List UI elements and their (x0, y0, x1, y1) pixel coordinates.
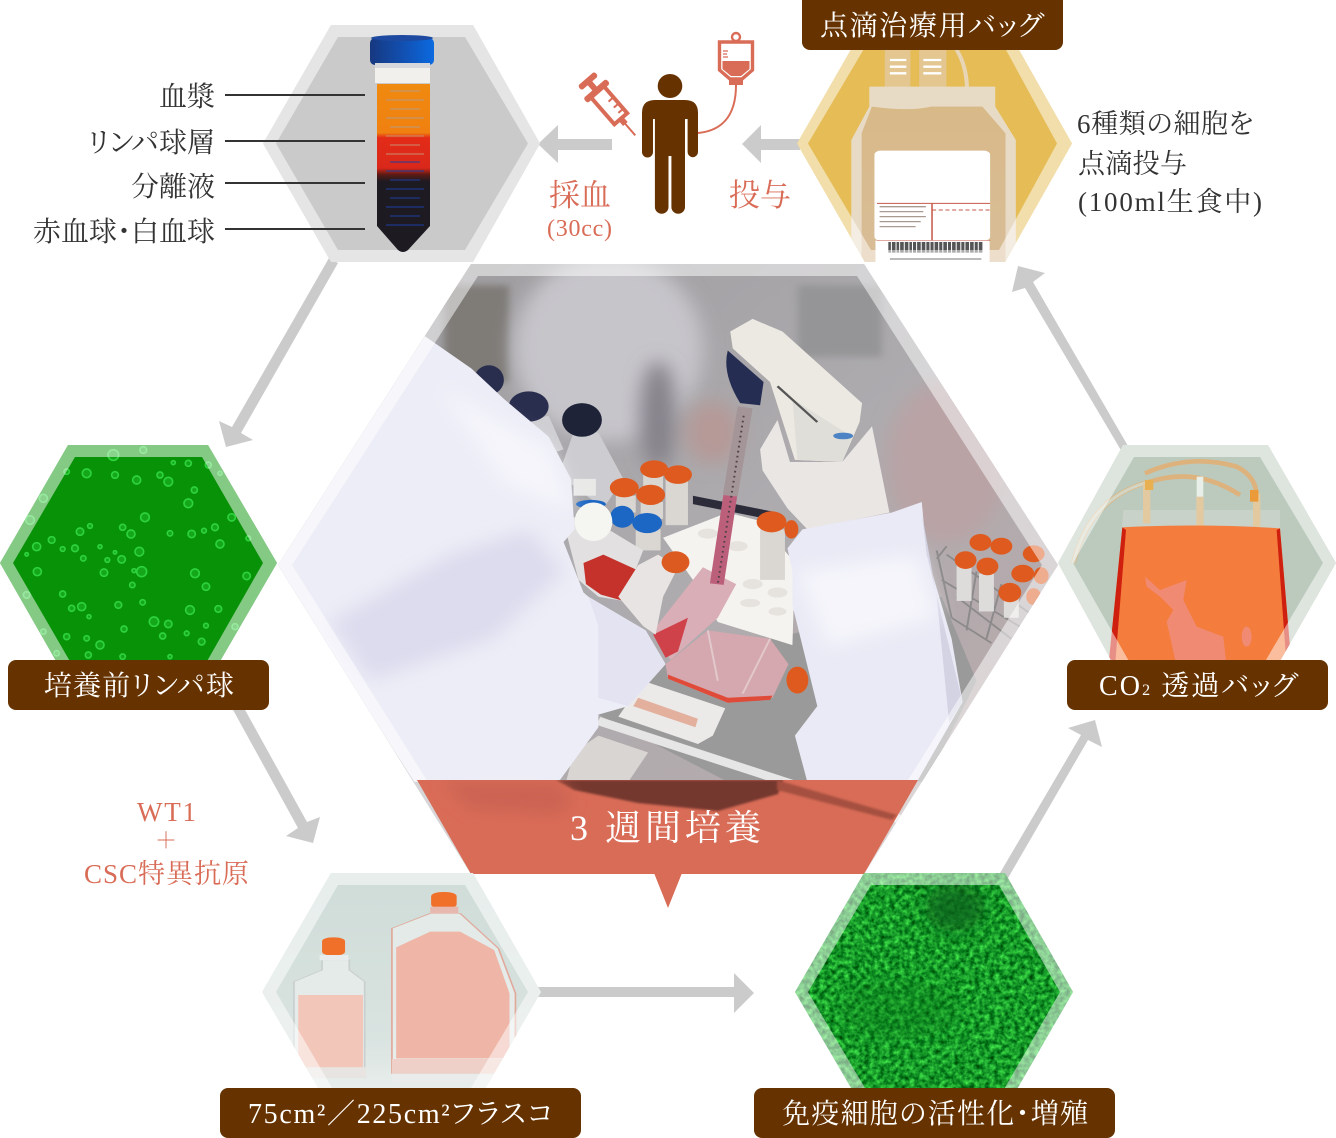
image: orange culture bag (1073, 461, 1292, 667)
label: lymphocyte layer: リンパ球層 (88, 127, 215, 159)
arrow: person to tube (blood draw) (538, 125, 612, 163)
small flask (294, 960, 365, 1070)
right sleeve (787, 502, 963, 782)
label: separation liquid: 分離液 (131, 171, 215, 203)
pipette (730, 407, 745, 496)
tubes (616, 475, 785, 580)
flask on bench (666, 630, 788, 703)
label: administration: 投与 (729, 178, 791, 213)
image: lab worker in safety cabinet (275, 256, 1071, 887)
callout pointer (654, 873, 682, 908)
icon: syringe (575, 69, 647, 145)
image: drip bag (851, 50, 1016, 267)
left glove (618, 555, 678, 635)
pipette controller (730, 319, 862, 462)
packets (618, 681, 725, 744)
panel: pre-culture lymphocyte hexagon (0, 445, 277, 682)
label: CO2 permeable bag: CO2 透過バッグ (1099, 670, 1299, 702)
bench (598, 597, 976, 782)
panel: blood separation tube hexagon (263, 25, 540, 262)
label: pre-culture lymphocytes (8, 660, 269, 710)
label: drip treatment bag (802, 0, 1063, 50)
text block: six cell types administered: (100ml生食中) (1078, 187, 1262, 217)
label: blood draw: 採血 (549, 178, 611, 213)
arrow: tube to pre-culture lymphocytes (219, 258, 338, 447)
label: drip treatment bag: 点滴治療用バッグ (820, 10, 1045, 42)
banner: three weeks of culture (417, 780, 918, 908)
large flask (392, 913, 515, 1073)
wire rack (937, 546, 1036, 643)
arrow: pre-culture lymphocytes to flasks (232, 708, 320, 843)
panel: central photo hexagon (275, 256, 1071, 908)
label: WT1 plus CSC-specific antigen: WT1 (137, 797, 196, 827)
image: dense green cells (795, 873, 1073, 1110)
arrow: flasks to activated cells (538, 973, 754, 1013)
image: centrifuge tube (370, 35, 434, 252)
panel: activated immune cells hexagon (795, 873, 1073, 1110)
label: pre-culture lymphocytes: 培養前リンパ球 (44, 670, 234, 702)
label: WT1 plus CSC-specific antigen (84, 797, 249, 889)
rack white (663, 513, 795, 645)
icon: person (642, 74, 698, 214)
leader lines (225, 95, 365, 229)
label: CO2 permeable bag (1067, 660, 1328, 710)
red flask (568, 517, 643, 600)
text block: six cell types administered: 6種類の細胞を (1077, 109, 1254, 139)
label: flask sizes (220, 1088, 581, 1138)
right glove (760, 420, 889, 529)
bench bar (598, 721, 902, 820)
arrow: activated cells to CO2 bag (1000, 720, 1102, 878)
label: red and white blood cells: 赤血球・白血球 (33, 216, 215, 248)
banner: three weeks of culture: 3 週間培養 (570, 808, 761, 848)
label: 30cc: (30cc) (547, 216, 612, 242)
main coat (275, 336, 666, 782)
image: sparse green cells (23, 447, 251, 659)
arrow: CO2 bag to drip bag (1012, 266, 1128, 452)
arrow: drip bag to person (administration) (742, 125, 800, 163)
label: WT1 plus CSC-specific antigen: CSC特異抗原 (84, 859, 249, 889)
panel: culture flasks hexagon (262, 873, 541, 1110)
text block: six cell types administered (1077, 109, 1262, 217)
text block: six cell types administered: 点滴投与 (1078, 149, 1187, 179)
panel: CO2 permeable bag hexagon (1058, 445, 1336, 682)
label: plasma: 血漿 (159, 81, 215, 113)
label: flask sizes: 75cm²／225cm²フラスコ (248, 1099, 552, 1130)
bottles (530, 416, 564, 452)
label: activation and proliferation of immune cells (754, 1088, 1115, 1138)
image: two culture flasks (294, 892, 515, 1083)
label: WT1 plus CSC-specific antigen: ＋ (157, 828, 175, 853)
label: activation and proliferation of immune cells: 免疫細胞の活性化・増殖 (782, 1098, 1088, 1130)
panel: drip treatment bag hexagon (797, 50, 1072, 262)
tilted flask (653, 567, 736, 660)
icon: IV drip bag (698, 33, 752, 133)
